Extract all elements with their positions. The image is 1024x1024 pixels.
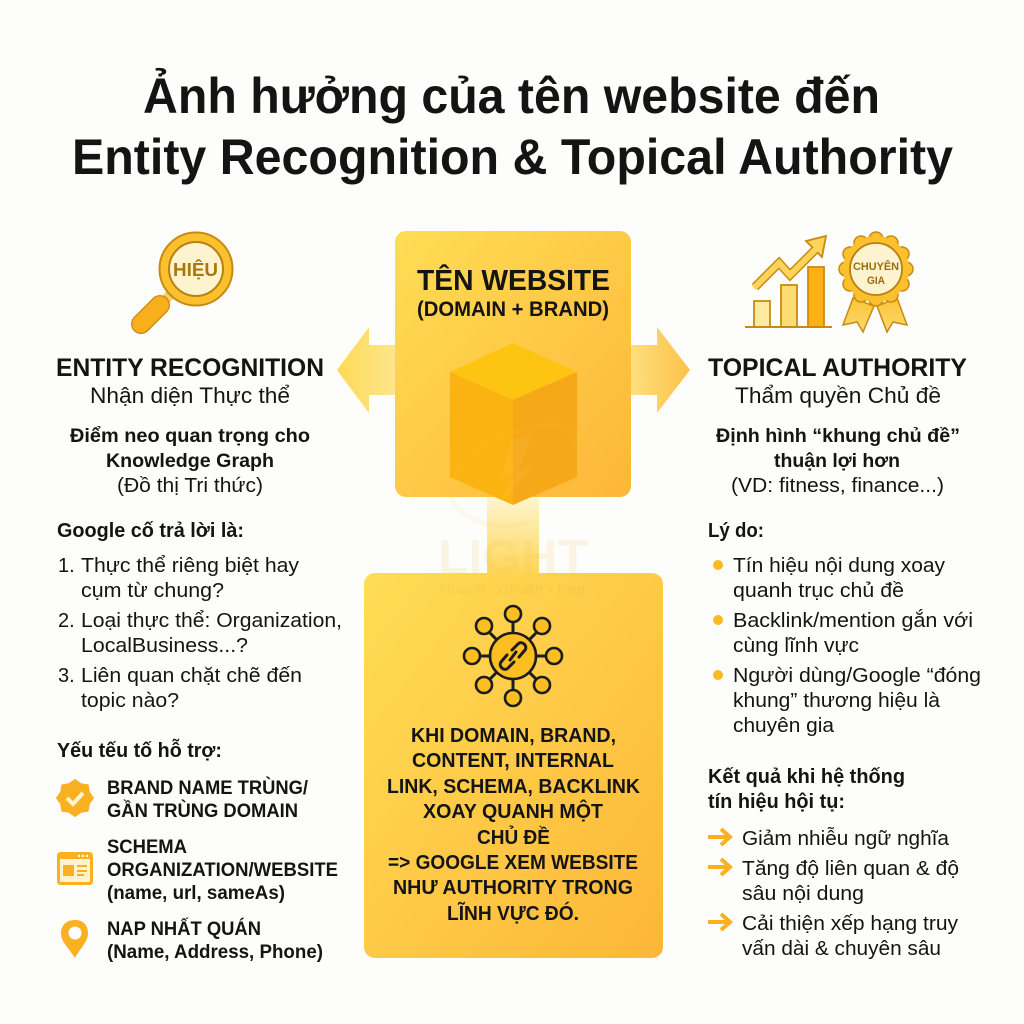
text block: knowledge graph anchor: Knowledge Graph (106, 450, 274, 472)
text block: google questions: 2. (58, 610, 75, 632)
text block: schema: ORGANIZATION/WEBSITE (107, 860, 338, 881)
text block: google questions: Google cố trả lời là: (57, 520, 244, 542)
text block: google questions (57, 520, 342, 712)
heading: results: tín hiệu hội tụ: (708, 791, 845, 813)
icon: verified badge (56, 780, 94, 816)
text block: topic frame (716, 425, 960, 497)
heading: topical authority: Thẩm quyền Chủ đề (735, 383, 941, 408)
heading: entity recognition: Nhận diện Thực thể (90, 383, 290, 408)
text block: schema (107, 837, 338, 904)
text block: NAP (107, 918, 323, 963)
text block: summary: CHỦ ĐỀ (477, 825, 550, 849)
text block: google questions: Thực thể riêng biệt hay (81, 555, 299, 577)
arrow: left to entity recognition (337, 327, 396, 413)
text block: google questions: 3. (58, 665, 75, 687)
panel: entity recognition (56, 232, 342, 963)
text block: google questions: topic nào? (81, 690, 179, 712)
icon: location pin (61, 920, 88, 958)
watermark: tagline: Nhanh - Chuẩn - Đẹp (440, 581, 585, 597)
list: reasons: khung” thương hiệu là (733, 690, 941, 712)
title (72, 68, 953, 185)
title: Entity Recognition & Topical Authority (72, 129, 953, 185)
heading: website name: (DOMAIN + BRAND) (417, 298, 609, 321)
text block: brand name: GẦN TRÙNG DOMAIN (107, 800, 298, 822)
icon: link network (464, 606, 562, 706)
list: reasons: chuyên gia (733, 715, 835, 737)
list: results: Tăng độ liên quan & độ (742, 858, 959, 880)
heading: reasons: Lý do: (708, 520, 764, 542)
list: results (708, 827, 959, 960)
heading: topical authority: TOPICAL AUTHORITY (708, 354, 967, 382)
icon: expert badge (839, 232, 913, 332)
heading: website name: TÊN WEBSITE (417, 263, 610, 297)
list: results: Giảm nhiễu ngữ nghĩa (742, 827, 950, 850)
text block: summary: LINK, SCHEMA, BACKLINK (387, 776, 641, 798)
arrow: right to topical authority (630, 327, 690, 413)
icon: expert badge: CHUYÊN (853, 260, 899, 273)
text block: schema: SCHEMA (107, 837, 187, 858)
text block: topic frame: Định hình “khung chủ đề” (716, 425, 960, 447)
heading: supporting factors: Yếu tếu tố hỗ trợ: (57, 738, 222, 762)
list: reasons (713, 555, 981, 737)
text block: summary: CONTENT, INTERNAL (412, 750, 614, 772)
icon: magnifier: HIỆU (173, 259, 218, 280)
heading: website name (417, 263, 610, 321)
text block: schema: (name, url, sameAs) (107, 883, 285, 904)
text block: summary (387, 725, 641, 925)
text block: NAP: NAP NHẤT QUÁN (107, 918, 261, 940)
heading: entity recognition (56, 354, 324, 408)
text block: summary: LĨNH VỰC ĐÓ. (447, 901, 579, 925)
text block: google questions: cụm từ chung? (81, 580, 224, 602)
panel: convergence summary (364, 573, 663, 958)
text block: knowledge graph anchor: (Đồ thị Tri thức) (117, 475, 263, 497)
text block: knowledge graph anchor (70, 425, 310, 497)
icon: growth chart (745, 236, 832, 327)
text block: brand name (107, 777, 309, 822)
text block: topic frame: (VD: fitness, finance...) (731, 475, 944, 497)
list: reasons: Tín hiệu nội dung xoay (733, 555, 945, 577)
list: reasons: quanh trục chủ đề (733, 580, 904, 602)
icon: expert badge: GIA (867, 275, 885, 287)
list: reasons: cùng lĩnh vực (733, 635, 859, 657)
title: Ảnh hưởng của tên website đến (143, 68, 880, 124)
text block: google questions: 1. (58, 555, 75, 577)
list: results: sâu nội dung (742, 883, 864, 905)
list: results: Cải thiện xếp hạng truy (742, 913, 958, 935)
icon: cube (450, 343, 577, 505)
text block: summary: KHI DOMAIN, BRAND, (411, 725, 616, 747)
connector: top box to bottom box (487, 497, 539, 574)
list: results: vấn dài & chuyên sâu (742, 938, 941, 960)
text block: google questions: LocalBusiness...? (81, 635, 248, 657)
text block: summary: XOAY QUANH MỘT (423, 799, 603, 823)
heading: results (708, 766, 905, 813)
text block: knowledge graph anchor: Điểm neo quan trọng cho (70, 425, 310, 447)
text block: NAP: (Name, Address, Phone) (107, 942, 323, 963)
text block: brand name: BRAND NAME TRÙNG/ (107, 777, 309, 799)
panel: topical authority (708, 232, 981, 960)
text block: google questions: Liên quan chặt chẽ đến (81, 665, 302, 687)
text block: topic frame: thuận lợi hơn (774, 450, 900, 472)
icon: magnifier (141, 232, 232, 324)
heading: topical authority (708, 354, 967, 408)
text block: summary: => GOOGLE XEM WEBSITE (388, 852, 638, 874)
panel: website name (395, 231, 631, 505)
icon: schema window (58, 853, 92, 884)
text block: summary: NHƯ AUTHORITY TRONG (393, 877, 633, 899)
heading: entity recognition: ENTITY RECOGNITION (56, 354, 324, 382)
heading: results: Kết quả khi hệ thống (708, 766, 905, 788)
text block: google questions: Loại thực thể: Organization, (81, 610, 342, 632)
watermark: logo (438, 425, 588, 583)
watermark: logo: LIGHT (438, 530, 588, 583)
list: reasons: Người dùng/Google “đóng (733, 665, 981, 687)
list: reasons: Backlink/mention gắn với (733, 609, 973, 632)
